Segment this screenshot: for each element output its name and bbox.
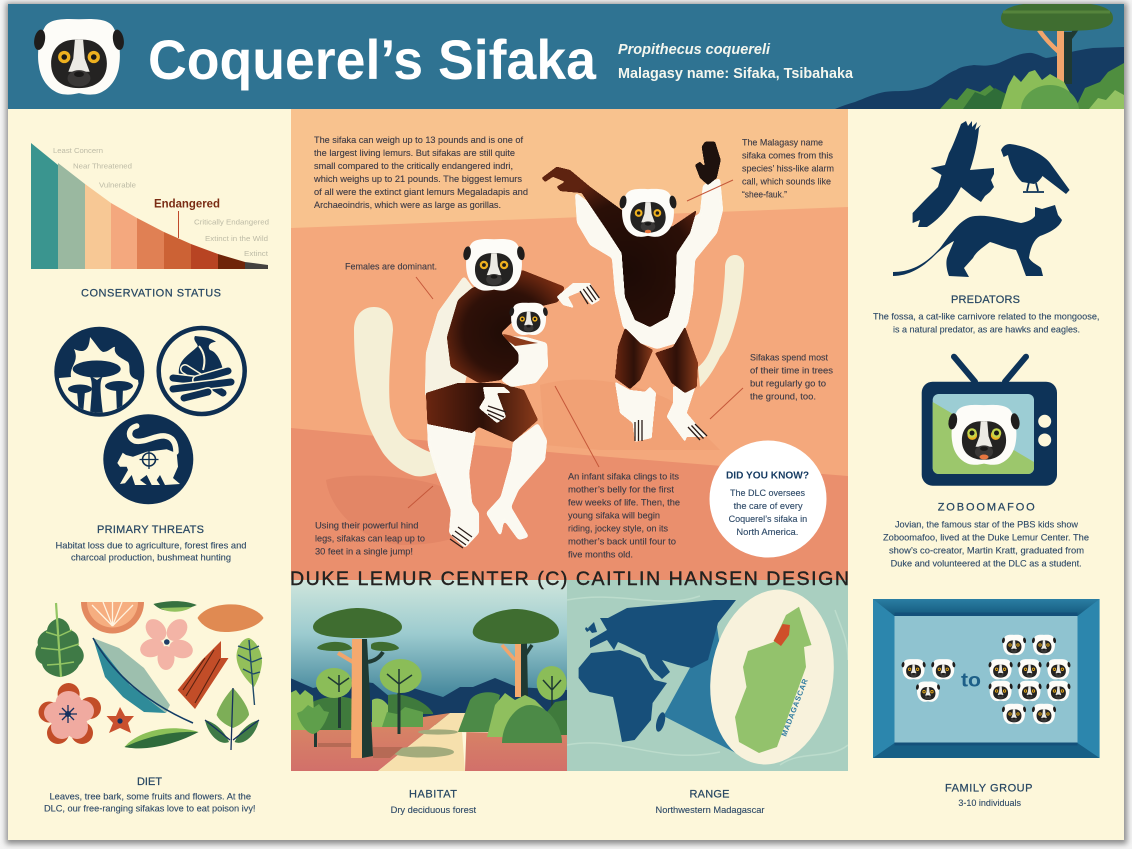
- text: trees and ground: of their time in trees: [750, 366, 833, 376]
- map: magnified island: [710, 590, 834, 764]
- status labels: Extinct in the Wild: [205, 234, 268, 243]
- mountains: [290, 678, 567, 725]
- tongue: [645, 230, 651, 233]
- heading: zoboomafoo: ZOBOOMAFOO: [938, 502, 1036, 514]
- icon: striped leaf: [236, 638, 262, 705]
- heading: predators: PREDATORS: [951, 294, 1021, 306]
- panel: predators: [873, 121, 1100, 334]
- icon: small leaf: [153, 601, 197, 612]
- callout: did you know: DID YOU KNOW?: [726, 470, 809, 482]
- icon: perched hawk: [1001, 144, 1070, 194]
- baobab left: [313, 608, 402, 758]
- ground: [290, 713, 567, 771]
- zoboomafoo description: Duke and volunteered at the DLC as a student.: [891, 558, 1082, 568]
- text: trees and ground: [750, 352, 833, 402]
- map background: [567, 580, 848, 771]
- panel: lemur illustration: [291, 109, 848, 590]
- icon: long leaf: [124, 728, 198, 748]
- text: infant: An infant sifaka clings to its: [568, 472, 679, 482]
- icon: sweet potato: [198, 604, 264, 632]
- icon: bushmeat hunting: [103, 414, 193, 504]
- icon: poison ivy: [205, 688, 259, 750]
- frame: [873, 599, 1100, 758]
- text: infant: riding, jockey style, on its: [568, 524, 668, 534]
- scientific name: Propithecus coquereli: [618, 41, 771, 58]
- text: infant: [568, 472, 680, 560]
- panel: habitat scene: [290, 580, 567, 771]
- hand on hip: [479, 387, 511, 423]
- text: leaping: Using their powerful hind: [315, 520, 418, 530]
- caption: habitat: [391, 788, 477, 815]
- left leg: [615, 382, 656, 442]
- callout: did you know: North America.: [736, 527, 798, 537]
- callout: did you know: The DLC oversees: [730, 488, 806, 498]
- left leg: [427, 422, 479, 548]
- group of ten lemurs: [988, 635, 1071, 724]
- sky: [291, 580, 567, 697]
- text: size of the sifaka: [313, 135, 528, 210]
- caption: range: [656, 788, 765, 815]
- text: size of the sifaka: which weighs up to 21 pounds. The biggest lemurs: [313, 174, 522, 184]
- threats description: charcoal production, bushmeat hunting: [71, 552, 231, 562]
- foot stripes: [450, 527, 472, 548]
- title: Coquerel’s Sifaka: [148, 28, 597, 91]
- text: trees and ground: Sifakas spend most: [750, 352, 828, 362]
- bushes front: [458, 692, 567, 743]
- status labels: Near Threatened: [73, 162, 132, 170]
- diet description: [44, 792, 256, 814]
- right hand: [695, 142, 721, 185]
- to label: to: [961, 671, 981, 692]
- icon: feather: [93, 638, 193, 723]
- icon: charcoal fire: [159, 328, 245, 414]
- icon: forest fire: [54, 327, 145, 425]
- head: [619, 189, 677, 237]
- header scenery: mountains, tree and bushes: [835, 2, 1124, 109]
- threats description: [56, 540, 247, 562]
- diet description: DLC, our free-ranging sifakas love to eat poison ivy!: [44, 804, 256, 814]
- torso: [447, 270, 565, 383]
- text: malagasy name: “shee-fauk.”: [742, 190, 787, 200]
- callout lines: [408, 180, 743, 508]
- text: malagasy name: call, which sounds like: [742, 176, 831, 186]
- shorts: [426, 383, 538, 442]
- heading: primary threats: PRIMARY THREATS: [97, 524, 205, 536]
- icon: flying eagle: [913, 121, 994, 227]
- thighs: [615, 328, 653, 389]
- predators description: is a natural predator, as are hawks and eagles.: [893, 324, 1080, 334]
- icon: leaf with lobes: [35, 603, 84, 677]
- heading: diet: DIET: [137, 776, 163, 788]
- text: leaping: [315, 520, 425, 556]
- text: malagasy name: sifaka comes from this: [742, 150, 833, 160]
- chart: status stepped curve: [31, 143, 268, 269]
- icon: orange slice: [81, 602, 144, 634]
- background bands: [291, 109, 848, 590]
- callout: did you know: Coquerel’s sifaka in: [729, 514, 807, 524]
- text: size of the sifaka: small compared to the critically endangered indri,: [314, 161, 513, 171]
- status labels: Extinct: [244, 249, 269, 258]
- heading: family group: FAMILY GROUP: [945, 782, 1034, 794]
- panel: zoboomafoo: [883, 357, 1089, 568]
- white fringe: [575, 178, 723, 349]
- malagasy name: Malagasy name: Sifaka, Tsibahaka: [618, 66, 854, 82]
- zoboomafoo description: [883, 520, 1089, 568]
- small trees: [297, 659, 567, 747]
- bushes back: [290, 690, 433, 730]
- caption: range: RANGE: [690, 788, 730, 800]
- diet description: Leaves, tree bark, some fruits and flowers. At the: [50, 792, 251, 802]
- caption: habitat: HABITAT: [409, 788, 458, 800]
- watermark: DUKE LEMUR CENTER (C) CAITLIN HANSEN DESIGN: [290, 568, 849, 590]
- text: size of the sifaka: Archaeoindris, which were as large as gorillas.: [314, 200, 501, 210]
- endangered marker: Endangered: [154, 198, 220, 210]
- icon: fossa: [893, 205, 1062, 277]
- text: malagasy name: species’ hiss-like alarm: [742, 164, 834, 174]
- family group description: 3-10 individuals: [958, 798, 1022, 808]
- heading: conservation status: CONSERVATION STATUS: [81, 288, 222, 300]
- reaching hand: [557, 283, 600, 308]
- text: malagasy name: The Malagasy name: [742, 138, 823, 148]
- white back: [425, 276, 482, 398]
- foot stripes: [635, 420, 707, 441]
- text: size of the sifaka: of all were the extinct giant lemurs Megaladapis and: [314, 187, 528, 197]
- icon: mini flower: [106, 707, 134, 733]
- icon: tree bark: [178, 641, 228, 709]
- ground shadows: [318, 729, 458, 758]
- panel: family group: [873, 599, 1100, 808]
- panel: primary threats: [54, 327, 247, 562]
- icon: red flower: [38, 683, 101, 744]
- text: leaping: legs, sifakas can leap up to: [315, 534, 425, 544]
- text: infant: mother’s back until four to: [568, 536, 676, 546]
- predators description: The fossa, a cat-like carnivore related to the mongoose,: [873, 312, 1100, 322]
- map: africa and eurasia: [579, 600, 736, 742]
- text: infant: five months old.: [568, 550, 633, 560]
- map: magnified island: MADAGASCAR: [779, 677, 810, 738]
- icon: lemur face: [33, 19, 125, 95]
- cone of magnification: [664, 620, 736, 753]
- status labels: Least Concern: [53, 146, 103, 155]
- lemur: mother with infant: [354, 239, 600, 548]
- lemur: leaping adult: [542, 142, 744, 442]
- text: malagasy name: [742, 138, 834, 200]
- text: females: Females are dominant.: [345, 262, 437, 272]
- right leg: [486, 423, 547, 540]
- zoboomafoo description: Zoboomafoo, lived at the Duke Lemur Center. The: [883, 532, 1089, 542]
- status labels: [53, 146, 269, 258]
- zoboomafoo description: Jovian, the famous star of the PBS kids show: [895, 520, 1079, 530]
- text: trees and ground: the ground, too.: [750, 392, 816, 402]
- belly: [501, 336, 548, 387]
- status labels: Critically Endangered: [194, 218, 269, 226]
- tail: [698, 255, 744, 387]
- dark arms and torso: [542, 167, 697, 327]
- baobab right: [473, 609, 559, 697]
- predators description: [873, 312, 1100, 334]
- zoboomafoo description: show’s co-creator, Martin Kratt, graduated from: [889, 546, 1084, 556]
- group of three lemurs: [901, 659, 956, 702]
- text: leaping: 30 feet in a single jump!: [315, 546, 413, 556]
- callout: did you know: [710, 440, 826, 558]
- infant head: [509, 303, 548, 335]
- mother head: [462, 239, 526, 291]
- header banner: [8, 2, 1124, 109]
- text: trees and ground: but regularly go to: [750, 378, 826, 388]
- text: infant: young sifaka will begin: [568, 510, 660, 520]
- text: size of the sifaka: the largest living lemurs. But sifakas are still quite: [314, 148, 515, 158]
- text: infant: mother’s belly for the first: [568, 484, 674, 494]
- icon: television: [922, 357, 1057, 486]
- callout: did you know: the care of every: [734, 501, 803, 511]
- caption: habitat: Dry deciduous forest: [391, 805, 477, 815]
- text: size of the sifaka: The sifaka can weigh up to 13 pounds and is one of: [314, 135, 523, 145]
- water ripples: [567, 596, 848, 765]
- text: infant: few weeks of life. Then, the: [568, 498, 680, 508]
- threats description: Habitat loss due to agriculture, forest fires and: [56, 540, 247, 550]
- endangered marker: [154, 198, 220, 238]
- caption: range: Northwestern Madagascar: [656, 805, 765, 815]
- panel: conservation status: [31, 143, 269, 300]
- status labels: Vulnerable: [99, 180, 136, 190]
- icon: pink flower: [138, 615, 195, 670]
- panel: range map: [567, 580, 848, 773]
- right leg: [667, 383, 707, 442]
- tail: [354, 307, 436, 476]
- panel: diet: [35, 601, 263, 814]
